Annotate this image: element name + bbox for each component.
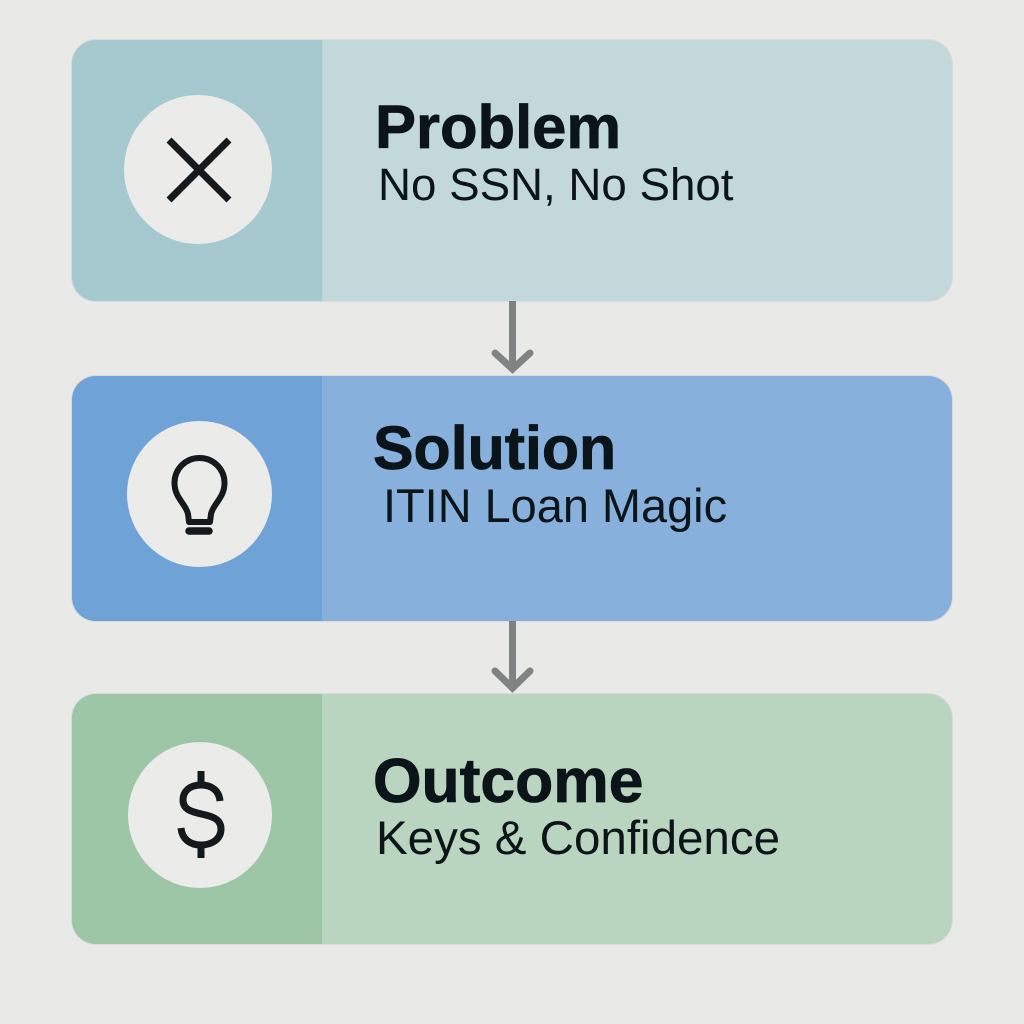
heading: solution: Solution xyxy=(373,414,616,482)
text: outcome subtitle: Keys & Confidence xyxy=(376,812,780,865)
icon circle: problem xyxy=(124,95,272,244)
panel: problem xyxy=(72,40,952,301)
icon circle: solution xyxy=(127,421,272,567)
panel side: outcome icon area xyxy=(72,694,322,944)
icon: dollar sign xyxy=(178,771,224,858)
heading: outcome: Outcome xyxy=(373,747,643,816)
icon circle: outcome xyxy=(128,742,272,888)
panel: outcome xyxy=(72,694,952,944)
icon: light bulb xyxy=(172,455,228,535)
icon: cross xyxy=(166,138,232,202)
text: solution subtitle: ITIN Loan Magic xyxy=(383,480,727,532)
heading: problem: Problem xyxy=(375,93,621,162)
text: problem subtitle: No SSN, No Shot xyxy=(378,159,734,210)
arrow: solution to outcome xyxy=(492,621,534,693)
panel side: problem icon area xyxy=(72,40,322,301)
panel: solution xyxy=(72,376,952,621)
panel side: solution icon area xyxy=(72,376,322,621)
arrow: problem to solution xyxy=(492,301,534,374)
